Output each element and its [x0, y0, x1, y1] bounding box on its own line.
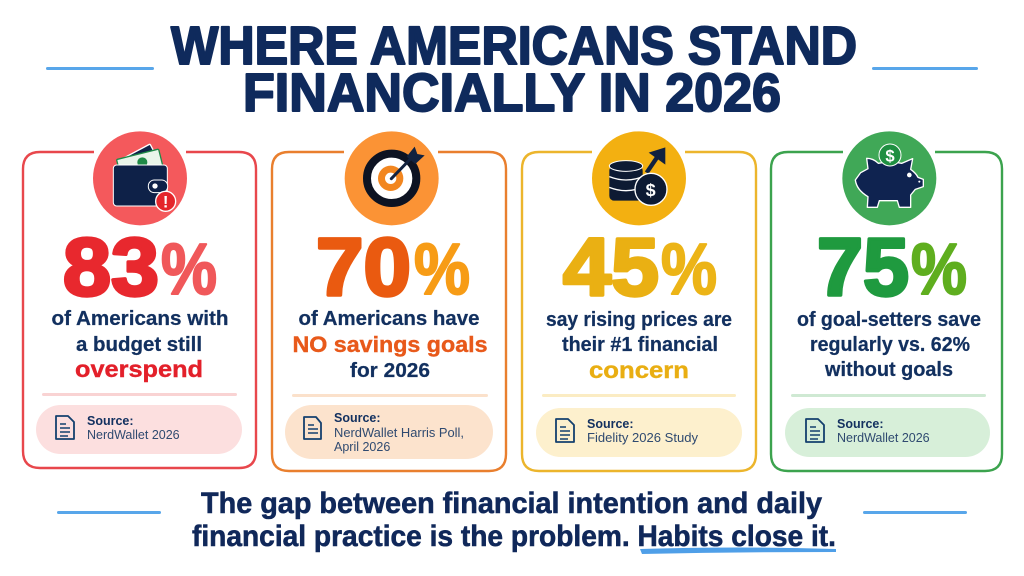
description: concern [589, 357, 689, 383]
panel: overspend [23, 131, 256, 468]
icon: target [345, 131, 439, 225]
bottom accent line left [57, 511, 161, 514]
source pill: April 2026 [334, 440, 390, 454]
description: of Americans have [298, 308, 480, 330]
bottom takeaway text: financial practice is the problem. Habits close it. [192, 520, 836, 553]
title accent line left [46, 67, 154, 70]
source pill: NerdWallet 2026 [87, 428, 180, 442]
icon: wallet [93, 131, 187, 225]
bottom takeaway text: The gap between financial intention and daily [201, 487, 822, 520]
panel: rising prices [522, 131, 756, 471]
icon: document [56, 416, 74, 439]
statistic 45% [563, 222, 717, 313]
description [797, 309, 981, 381]
description: of Americans with [52, 308, 228, 330]
description [292, 308, 488, 382]
card frame [272, 152, 506, 471]
highlight underline [640, 548, 836, 554]
title: WHERE AMERICANS STAND [171, 16, 857, 76]
description [52, 308, 228, 382]
description: regularly vs. 62% [810, 334, 970, 356]
source pill: Source: [587, 417, 634, 431]
source pill: Source: [837, 417, 884, 431]
source pill: Fidelity 2026 Study [587, 431, 699, 445]
icon: wallet: ! [163, 192, 168, 211]
title [171, 16, 857, 123]
icon: piggy bank [842, 131, 936, 225]
source pill [785, 408, 990, 457]
source pill: Source: [334, 411, 381, 425]
source pill [285, 405, 493, 459]
card frame [771, 152, 1002, 471]
bottom accent line right [863, 511, 967, 514]
icon: document [806, 419, 824, 442]
description: overspend [75, 356, 203, 382]
title: FINANCIALLY IN 2026 [243, 63, 781, 123]
statistic 83% [63, 222, 217, 313]
statistic 70%: % [414, 230, 470, 310]
statistic 83%: % [161, 230, 217, 310]
description: say rising prices are [546, 309, 732, 331]
panel: goal-setters save [771, 131, 1002, 471]
description: for 2026 [350, 360, 430, 382]
statistic 70%: 70 [316, 222, 411, 313]
description: a budget still [76, 334, 202, 356]
icon: coins and arrow: $ [646, 180, 656, 200]
statistic 45%: % [661, 230, 717, 310]
icon: document [304, 417, 321, 439]
statistic 75%: % [911, 230, 967, 310]
title accent line right [872, 67, 978, 70]
description: their #1 financial [562, 334, 718, 356]
source pill: NerdWallet 2026 [837, 431, 930, 445]
statistic 75%: 75 [817, 222, 909, 313]
description: without goals [824, 359, 953, 381]
icon: piggy bank: $ [885, 146, 895, 165]
icon: document [556, 419, 574, 442]
source pill: Source: [87, 414, 134, 428]
card frame [23, 152, 256, 468]
bottom takeaway text [192, 487, 836, 553]
statistic 45%: 45 [563, 222, 659, 313]
icon: coins and arrow [592, 131, 686, 225]
statistic 70% [316, 222, 470, 313]
card frame [522, 152, 756, 471]
source pill: NerdWallet Harris Poll, [334, 426, 464, 440]
description [546, 309, 732, 383]
statistic 83%: 83 [63, 222, 159, 313]
statistic 75% [817, 222, 967, 313]
panel: no savings goals [272, 131, 506, 471]
description: of goal-setters save [797, 309, 981, 331]
description: NO savings goals [292, 332, 488, 357]
source pill [36, 405, 242, 454]
source pill [536, 408, 742, 457]
